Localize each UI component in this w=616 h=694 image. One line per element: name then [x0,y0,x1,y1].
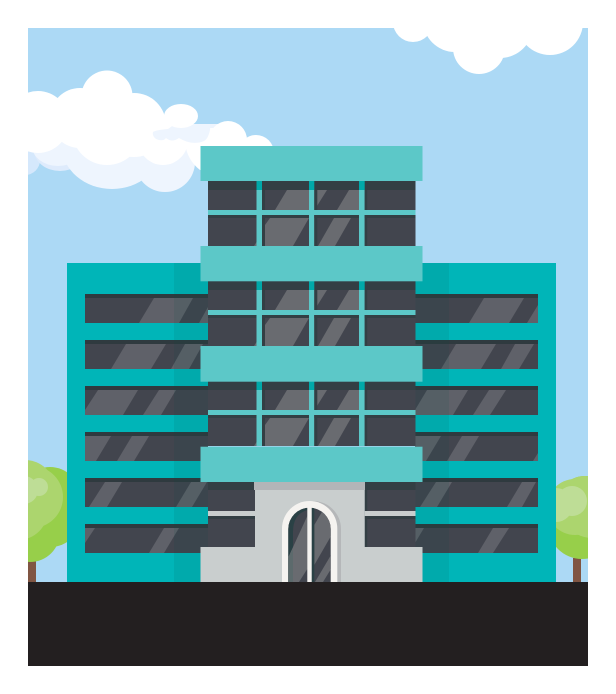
entrance door [282,501,341,582]
cornice band 2 [200,246,422,281]
cornice band 3 [200,346,422,382]
cloud: top right [394,28,582,74]
scenery clipped to the sky [28,28,588,582]
cornice band 4 [200,447,422,482]
left wing of building [67,263,208,582]
tree foliage: right [556,476,588,559]
tree: left [28,460,67,582]
entrance block [200,482,422,582]
tower window bay: upper [208,181,416,246]
left wing shaded strip [174,263,208,582]
central tower [200,146,422,582]
tree foliage: left [28,460,67,562]
left wing windows [85,294,208,553]
cloud: left large [7,70,274,192]
right wing shaded strip [415,263,449,582]
right wing windows [415,294,538,553]
tower window bay: lower [208,381,416,446]
ground [28,582,588,666]
tower window bay: middle [208,281,416,346]
sky background [28,28,588,582]
right wing of building [415,263,556,582]
ground floor side windows [208,482,416,547]
tree: right [556,476,588,582]
tree trunk: left [28,560,36,582]
tree trunk: right [573,558,581,582]
cornice band 1 [200,146,422,181]
